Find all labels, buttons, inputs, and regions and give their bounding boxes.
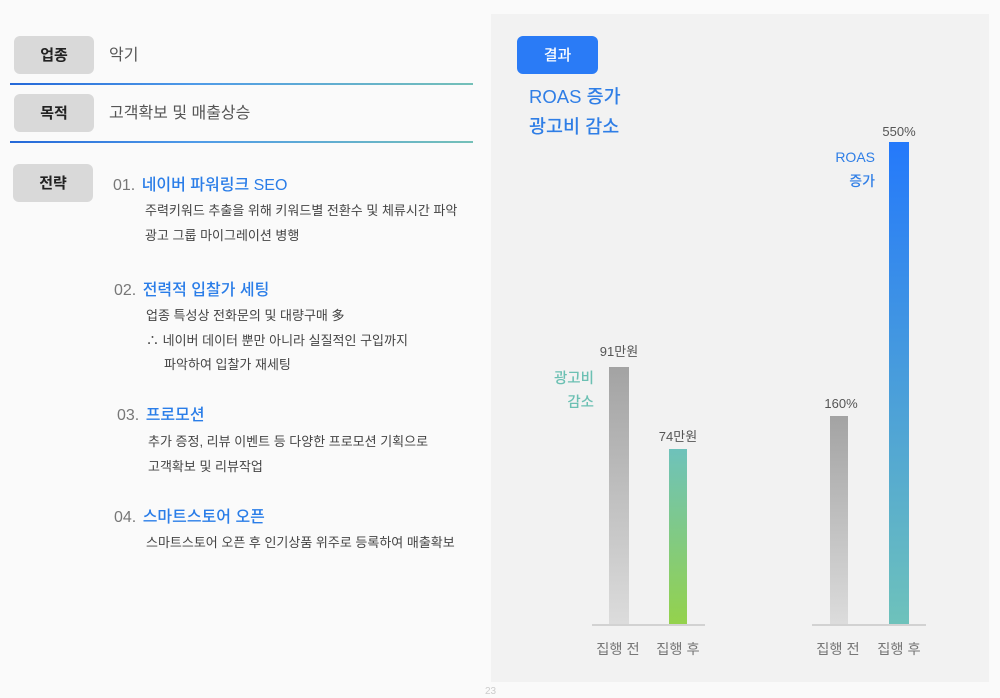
strategy 03 <box>117 406 428 474</box>
strategy 03 description <box>148 434 428 474</box>
tag: results <box>517 36 598 74</box>
tag: purpose <box>14 94 94 132</box>
tag: industry: 업종 <box>40 47 68 64</box>
strategy 02 <box>114 282 408 372</box>
tag: strategy: 전략 <box>39 175 67 192</box>
label: 160%: 160% <box>824 396 858 411</box>
strategy 01 description <box>145 203 457 242</box>
x label before: 집행 전 <box>596 642 640 658</box>
callout: ad spend decrease <box>554 370 594 411</box>
strategy 01 description: 주력키워드 추출을 위해 키워드별 전환수 및 체류시간 파악 <box>145 203 457 218</box>
label: 91만원: 91만원 <box>600 344 638 359</box>
strategy 02 description: 업종 특성상 전화문의 및 대량구매 多 <box>146 308 344 323</box>
ROAS axis line <box>812 624 926 626</box>
strategy 01 <box>113 176 457 242</box>
strategy 03 description: 추가 증정, 리뷰 이벤트 등 다양한 프로모션 기획으로 <box>148 434 428 449</box>
tag: industry <box>14 36 94 74</box>
label: 550%: 550% <box>882 124 916 139</box>
strategy 02 description <box>146 308 408 372</box>
ad spend axis line <box>592 624 705 626</box>
strategy 02 description: 파악하여 입찰가 재세팅 <box>164 357 291 372</box>
label: 74만원: 74만원 <box>659 429 697 444</box>
strategy 03 heading: 03. 프로모션 <box>117 407 205 424</box>
strategy 03 description: 고객확보 및 리뷰작업 <box>148 458 263 474</box>
results summary <box>529 86 621 137</box>
callout: ROAS increase <box>835 149 875 189</box>
x label before: 집행 전 <box>816 642 860 658</box>
industry value: 악기 <box>109 47 138 64</box>
strategy 02 description: ∴ 네이버 데이터 뿐만 아니라 실질적인 구입까지 <box>146 332 408 348</box>
chart: ad spend <box>609 367 687 624</box>
results summary: ROAS 증가 <box>529 86 621 107</box>
tag: results: 결과 <box>544 47 571 64</box>
chart: ROAS <box>830 142 909 624</box>
bar: spend before <box>609 367 629 624</box>
panel: results <box>491 14 989 682</box>
callout: ad spend decrease: 감소 <box>567 395 594 411</box>
strategy 04 heading: 04. 스마트스토어 오픈 <box>114 509 265 526</box>
strategy 04 description: 스마트스토어 오픈 후 인기상품 위주로 등록하여 매출확보 <box>146 535 455 550</box>
bar: ROAS after <box>889 142 909 624</box>
strategy 04 <box>114 508 455 550</box>
tag: purpose: 목적 <box>40 105 68 122</box>
results summary: 광고비 감소 <box>529 116 619 137</box>
purpose value: 고객확보 및 매출상승 <box>109 105 250 122</box>
x label after: 집행 후 <box>656 642 700 658</box>
callout: ROAS increase: ROAS <box>835 149 875 165</box>
x label after: 집행 후 <box>877 642 921 658</box>
bar: spend after <box>669 449 687 624</box>
callout: ROAS increase: 증가 <box>849 173 875 189</box>
page number: 23 <box>485 686 496 697</box>
strategy 02 heading: 02. 전력적 입찰가 세팅 <box>114 282 269 299</box>
strategy 01 description: 광고 그룹 마이그레이션 병행 <box>145 228 299 242</box>
strategy 01 heading: 01. 네이버 파워링크 SEO <box>113 177 287 194</box>
tag: strategy <box>13 164 93 202</box>
callout: ad spend decrease: 광고비 <box>554 371 594 387</box>
bar: ROAS before <box>830 416 848 624</box>
